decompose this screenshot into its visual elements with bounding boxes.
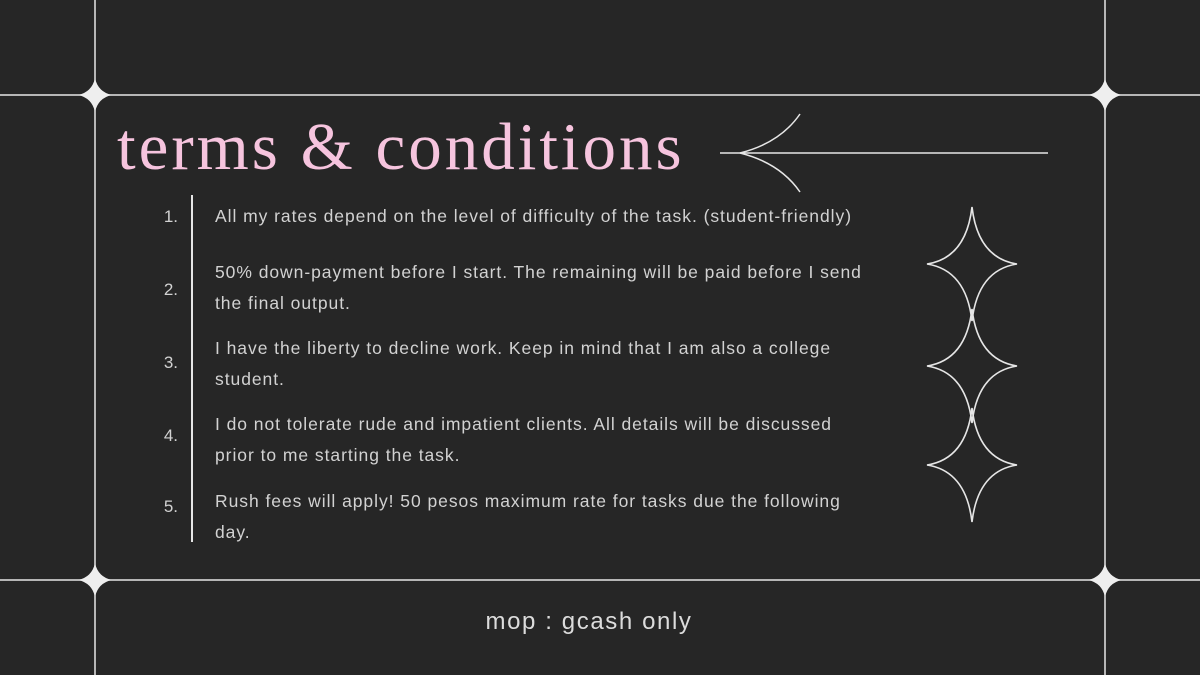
list: terms: All my rates depend on the level of difficulty of the task. (student-friendly) — [215, 206, 852, 226]
list: terms: prior to me starting the task. — [215, 445, 460, 465]
footer: payment method: mop : gcash only — [485, 608, 693, 635]
list: terms: the final output. — [215, 293, 351, 313]
list: terms: 5. — [164, 497, 178, 516]
arrow — [720, 114, 1048, 192]
list: terms: 1. — [164, 207, 178, 226]
list: terms: day. — [215, 522, 251, 542]
list divider — [191, 195, 193, 542]
list: terms: student. — [215, 369, 285, 389]
list: terms: I have the liberty to decline work. Keep in mind that I am also a college — [215, 338, 831, 358]
title: terms & conditions — [117, 110, 685, 184]
list: terms: I do not tolerate rude and impatient clients. All details will be discussed — [215, 414, 832, 434]
list: terms: 50% down-payment before I start. The remaining will be paid before I send — [215, 262, 862, 282]
list: terms: 3. — [164, 353, 178, 372]
list: terms: Rush fees will apply! 50 pesos maximum rate for tasks due the following — [215, 491, 841, 511]
decorative stars — [926, 206, 1018, 522]
list: terms — [164, 206, 862, 542]
list: terms: 4. — [164, 426, 178, 445]
list: terms: 2. — [164, 280, 178, 299]
